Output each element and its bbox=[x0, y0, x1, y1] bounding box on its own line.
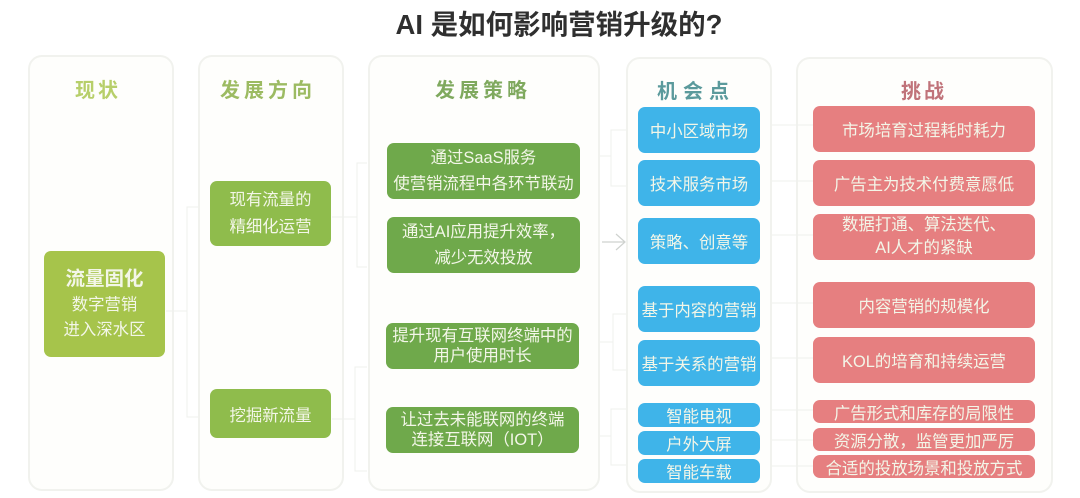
box: 智能电视 bbox=[638, 403, 760, 427]
box: 资源分散: 资源分散，监管更加严厉 bbox=[834, 432, 1014, 450]
box: 广告形式: 广告形式和库存的局限性 bbox=[834, 404, 1014, 422]
box: 基于关系的营销: 基于关系的营销 bbox=[642, 356, 756, 374]
box: 基于关系的营销 bbox=[638, 340, 760, 386]
panel: 挑战 bbox=[796, 57, 1053, 493]
box: AI应用: 通过AI应用提升效率， bbox=[402, 223, 565, 241]
box: 挖掘新流量 bbox=[210, 389, 331, 438]
box: 使用时长: 用户使用时长 bbox=[433, 347, 532, 365]
panel: 发展方向 bbox=[198, 55, 344, 491]
box: SaaS bbox=[387, 143, 580, 199]
panel: 发展策略 bbox=[368, 55, 600, 491]
box: 数据打通 bbox=[813, 214, 1035, 260]
heading: 挑战: 挑战 bbox=[901, 81, 947, 103]
box: 挖掘新流量: 挖掘新流量 bbox=[230, 406, 311, 424]
box: SaaS: 通过SaaS服务 bbox=[431, 149, 536, 167]
box: 流量固化 bbox=[44, 251, 165, 357]
box: 技术服务市场: 技术服务市场 bbox=[650, 176, 748, 194]
box: SaaS: 使营销流程中各环节联动 bbox=[393, 175, 574, 193]
box: 流量固化: 进入深水区 bbox=[64, 321, 145, 339]
box: 中小区域市场: 中小区域市场 bbox=[650, 123, 748, 141]
heading: 现状: 现状 bbox=[75, 80, 121, 102]
panel: 机会点 bbox=[626, 57, 772, 493]
box: 市场培育 bbox=[813, 106, 1035, 152]
box: AI应用: 减少无效投放 bbox=[434, 249, 533, 267]
box: 使用时长: 提升现有互联网终端中的 bbox=[392, 327, 573, 345]
box: 投放场景 bbox=[813, 455, 1035, 478]
box: 基于内容的营销 bbox=[638, 286, 760, 332]
box: IOT bbox=[386, 407, 579, 453]
heading: 机会点: 机会点 bbox=[657, 81, 735, 103]
box: 现有流量的精细化运营: 精细化运营 bbox=[230, 218, 311, 236]
box: 广告形式 bbox=[813, 400, 1035, 423]
box: KOL bbox=[813, 337, 1035, 383]
box: AI应用 bbox=[387, 217, 580, 273]
box: 投放场景: 合适的投放场景和投放方式 bbox=[826, 460, 1022, 478]
box: 流量固化: 数字营销 bbox=[72, 296, 137, 314]
box: 资源分散 bbox=[813, 428, 1035, 451]
box: 中小区域市场 bbox=[638, 107, 760, 153]
box: 户外大屏: 户外大屏 bbox=[666, 436, 732, 454]
box: 广告主: 广告主为技术付费意愿低 bbox=[834, 176, 1014, 194]
title: AI 是如何影响营销升级的? bbox=[396, 9, 722, 40]
box: 内容营销: 内容营销的规模化 bbox=[858, 298, 990, 316]
box: IOT: 让过去未能联网的终端 bbox=[401, 411, 564, 429]
box: 智能车载: 智能车载 bbox=[666, 464, 732, 482]
box: 技术服务市场 bbox=[638, 160, 760, 206]
heading: 发展方向: 发展方向 bbox=[220, 80, 316, 102]
box: 数据打通: 数据打通、算法迭代、 bbox=[842, 216, 1006, 234]
box: 广告主 bbox=[813, 160, 1035, 206]
box: 策略、创意等 bbox=[638, 218, 760, 264]
box: 现有流量的精细化运营: 现有流量的 bbox=[230, 190, 311, 208]
box: 流量固化: 流量固化 bbox=[65, 268, 144, 290]
box: 智能电视: 智能电视 bbox=[666, 408, 732, 426]
box: 智能车载 bbox=[638, 459, 760, 483]
box: 使用时长 bbox=[386, 323, 579, 369]
box: KOL: KOL的培育和持续运营 bbox=[842, 353, 1006, 371]
box: 数据打通: AI人才的紧缺 bbox=[875, 239, 973, 257]
panel: 现状 bbox=[28, 55, 174, 491]
heading: 发展策略: 发展策略 bbox=[435, 80, 531, 102]
box: 策略、创意等: 策略、创意等 bbox=[650, 234, 748, 252]
box: IOT: 连接互联网（IOT） bbox=[411, 431, 554, 449]
box: 基于内容的营销: 基于内容的营销 bbox=[642, 302, 756, 320]
box: 现有流量的精细化运营 bbox=[210, 181, 331, 246]
box: 内容营销 bbox=[813, 282, 1035, 328]
box: 市场培育: 市场培育过程耗时耗力 bbox=[842, 122, 1006, 140]
box: 户外大屏 bbox=[638, 431, 760, 455]
